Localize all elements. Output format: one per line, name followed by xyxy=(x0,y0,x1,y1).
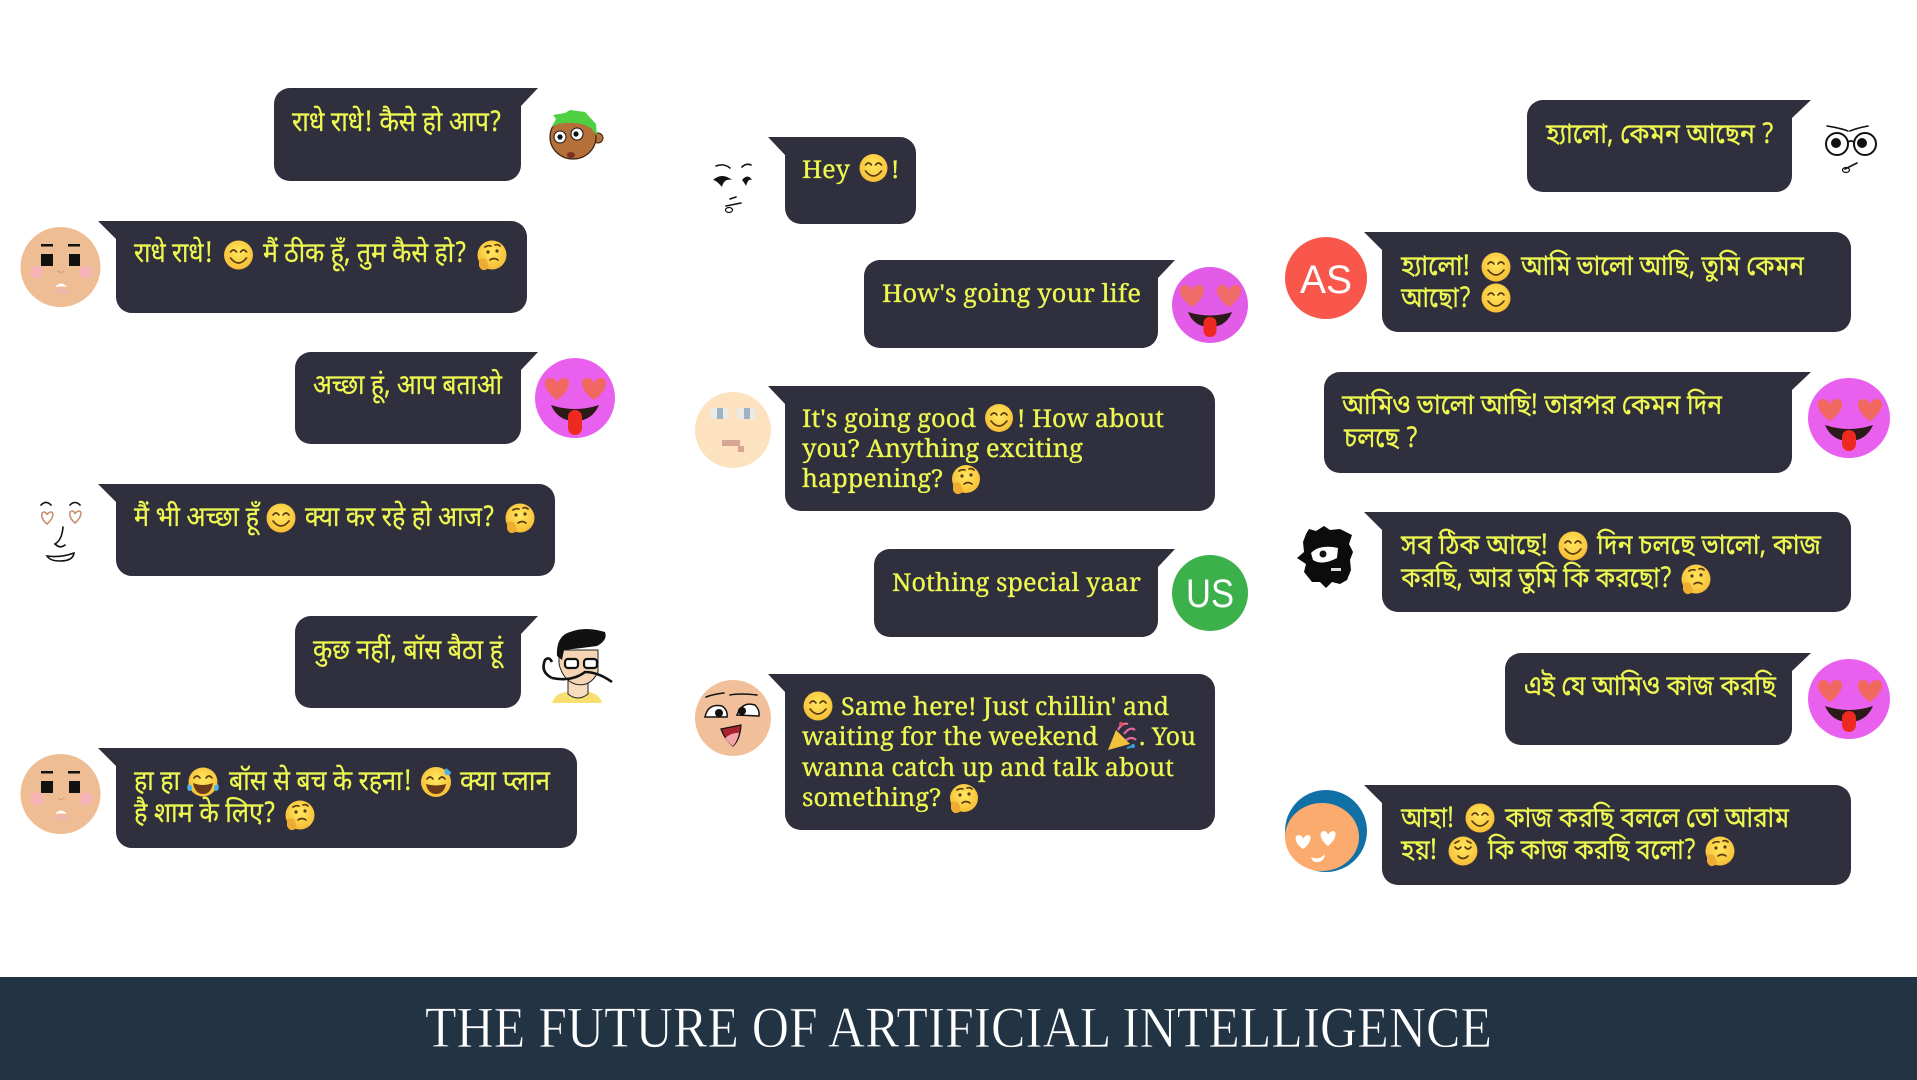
avatar: laughing cartoon face xyxy=(695,680,771,756)
message text: আছো? xyxy=(1400,282,1471,319)
bubble xyxy=(98,484,555,576)
message text: मैं भी अच्छा हूँ xyxy=(134,500,261,538)
footer band xyxy=(0,977,1917,1080)
message text: চলছে ? xyxy=(1343,422,1418,459)
message text: সব ঠিক আছে! xyxy=(1400,528,1548,566)
message: beware of boss xyxy=(20,748,577,848)
message text: How's going your life xyxy=(882,276,1141,310)
avatar: heart eyes xyxy=(1172,267,1248,343)
message text: কি কাজ করছি বলো? xyxy=(1487,833,1696,871)
message text: Nothing special yaar xyxy=(892,565,1141,599)
message: nothing special xyxy=(874,549,1248,637)
message text: Hey xyxy=(802,152,851,186)
message: how is life xyxy=(864,260,1248,348)
avatar: pale pixel face xyxy=(695,392,771,468)
message: what work xyxy=(1285,785,1851,885)
icon: smile xyxy=(1482,284,1510,312)
panel: Bengali chat xyxy=(1285,100,1890,885)
message text: waiting for the weekend xyxy=(802,719,1098,753)
avatar: sketched face xyxy=(713,164,752,212)
message text: দিন চলছে ভালো, কাজ xyxy=(1596,528,1822,566)
message text: something? xyxy=(802,780,941,814)
bubble xyxy=(768,137,916,224)
message: I am fine xyxy=(1285,232,1851,332)
message text: कुछ नहीं, बॉस बैठा हूं xyxy=(313,633,504,671)
message: hello how are you xyxy=(1527,100,1876,192)
icon: smile xyxy=(224,240,253,270)
message: going good xyxy=(695,386,1215,511)
message text: अच्छा हूं, आप बताओ xyxy=(313,368,503,406)
message text: আমি ভালো আছি, তুমি কেমন xyxy=(1520,249,1805,287)
icon: smile xyxy=(1482,252,1510,282)
title: THE FUTURE OF ARTIFICIAL INTELLIGENCE xyxy=(425,995,1492,1060)
bubble xyxy=(1364,232,1851,332)
bubble xyxy=(1364,785,1851,885)
message text: এই যে আমিও কাজ করছি xyxy=(1524,669,1777,707)
message: asks about today xyxy=(41,484,555,576)
message text: राधे राधे! xyxy=(134,236,213,274)
message: reply fine xyxy=(20,221,527,313)
panel: Hindi chat xyxy=(20,88,615,848)
icon: smile xyxy=(1466,804,1494,832)
bubble xyxy=(864,260,1175,348)
avatar: US initials xyxy=(1172,555,1248,631)
message: boss is sitting xyxy=(295,616,612,708)
icon: smile xyxy=(1558,532,1588,560)
message: greeting xyxy=(274,88,603,181)
icon: party popper xyxy=(1108,722,1136,750)
bubble xyxy=(98,221,527,313)
message text: হ্যালো! xyxy=(1400,250,1470,287)
bubble xyxy=(274,88,538,181)
avatar: man with moustache xyxy=(544,629,612,703)
icon: thinking xyxy=(1682,564,1710,594)
message text: হয়! xyxy=(1400,834,1437,871)
icon: relieved xyxy=(1448,836,1478,866)
message text: Same here! Just chillin' and xyxy=(841,689,1169,723)
avatar: peach face xyxy=(20,227,100,307)
avatar: heart eyes xyxy=(1808,378,1890,458)
message text: राधे राधे! कैसे हो आप? xyxy=(292,105,502,143)
message text: করছি, আর তুমি কি করছো? xyxy=(1400,561,1672,599)
icon: thinking xyxy=(478,240,506,270)
avatar: peach face xyxy=(20,754,100,834)
message text: কাজ করছি বললে তো আরাম xyxy=(1504,801,1790,839)
icon: thinking xyxy=(506,504,534,533)
bubble xyxy=(98,748,577,848)
icon: smile xyxy=(860,154,888,182)
icon: smile xyxy=(804,692,832,720)
avatar: blue hair face xyxy=(1285,790,1367,872)
message: all good working xyxy=(1297,512,1851,612)
avatar: boy with green hair xyxy=(550,110,603,159)
bubble xyxy=(1527,100,1811,192)
avatar: bearded man silhouette xyxy=(1297,526,1353,588)
message text: you? Anything exciting xyxy=(802,431,1084,465)
avatar: heart eyes xyxy=(535,358,615,438)
message text: क्या प्लान xyxy=(460,766,550,802)
message text: मैं ठीक हूँ, तुम कैसे हो? xyxy=(263,236,467,274)
bubble xyxy=(1324,372,1811,473)
avatar: AS initials xyxy=(1285,237,1367,319)
message text: ! xyxy=(891,152,899,186)
message text: It's going good xyxy=(802,401,976,435)
icon: sweat smile xyxy=(421,767,451,797)
message text: है शाम के लिए? xyxy=(134,796,276,834)
message text: . You xyxy=(1139,719,1196,753)
avatar: heart eyes xyxy=(1808,659,1890,739)
message: same here xyxy=(695,674,1215,830)
message text: happening? xyxy=(802,461,943,495)
bubble xyxy=(295,352,538,444)
bubble xyxy=(768,386,1215,511)
message: I am working too xyxy=(1505,653,1890,745)
bubble xyxy=(295,616,538,708)
bubble xyxy=(1505,653,1811,745)
avatar: AS initials: AS xyxy=(1300,258,1352,302)
message text: আহা! xyxy=(1400,802,1454,839)
icon: tears of joy xyxy=(187,768,219,796)
message text: हा हा xyxy=(134,766,181,802)
message: hey xyxy=(713,137,916,224)
message: how is the day going xyxy=(1324,372,1890,473)
bubble xyxy=(874,549,1175,637)
avatar: face with round glasses xyxy=(1826,126,1876,172)
icon: smile xyxy=(985,404,1013,432)
message text: ! How about xyxy=(1017,401,1164,435)
avatar: US initials: US xyxy=(1186,572,1234,616)
panel: English chat xyxy=(695,137,1248,830)
icon: thinking xyxy=(286,800,314,830)
message text: wanna catch up and talk about xyxy=(802,750,1174,784)
icon: thinking xyxy=(1706,836,1734,866)
avatar: line face with heart eyes xyxy=(41,502,81,561)
message text: बॉस से बच के रहना! xyxy=(229,764,412,802)
bubble xyxy=(1364,512,1851,612)
message: I am good xyxy=(295,352,615,444)
message text: হ্যালো, কেমন আছেন ? xyxy=(1545,118,1774,155)
bubble xyxy=(768,674,1215,830)
message text: क्या कर रहे हो आज? xyxy=(305,500,495,538)
icon: smile xyxy=(266,504,296,532)
icon: thinking xyxy=(952,465,980,494)
icon: thinking xyxy=(950,784,978,813)
message text: আমিও ভালো আছি! তারপর কেমন দিন xyxy=(1341,388,1723,426)
